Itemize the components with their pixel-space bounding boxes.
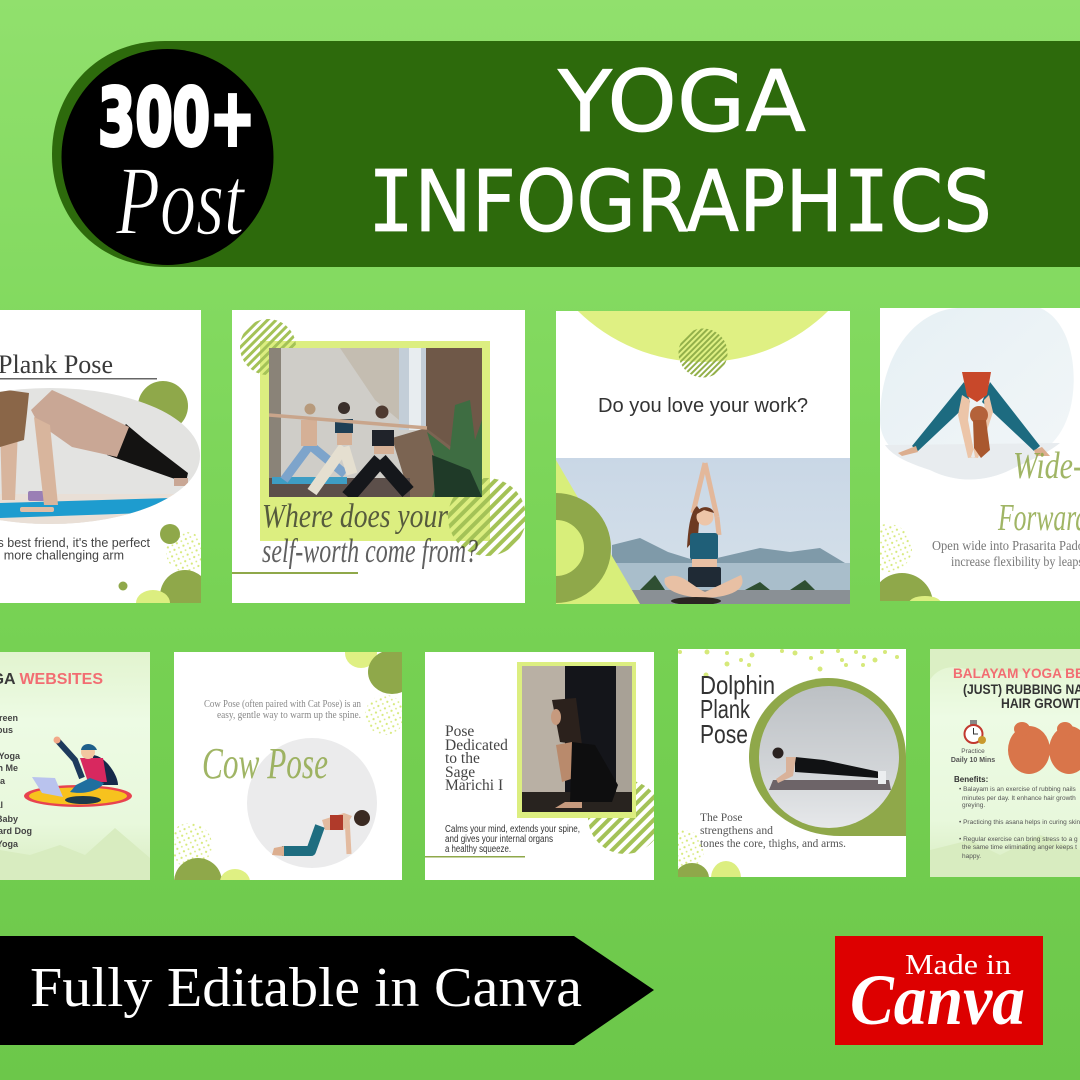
practice label	[951, 748, 995, 764]
panel: cow pose card	[174, 652, 402, 880]
benefits text: • Balayam is an exercise of rubbing nails	[959, 786, 1077, 793]
title: INFOGRAPHICS	[368, 153, 992, 252]
card text	[0, 536, 151, 562]
website list	[0, 713, 32, 849]
script heading: self-worth come from?	[262, 533, 478, 570]
card heading	[953, 665, 1080, 711]
decorative blobs and dots	[118, 524, 201, 603]
badge word: Post	[115, 147, 246, 256]
title: YOGA	[557, 53, 806, 152]
lime frame	[517, 662, 636, 818]
olive ring	[556, 493, 611, 603]
card heading	[445, 723, 508, 794]
olive oval frame	[749, 678, 906, 836]
decorative olive blob	[138, 381, 188, 424]
card text	[700, 812, 846, 850]
lime arc	[578, 311, 828, 362]
script heading: Cow Pose	[202, 739, 328, 788]
banner text: Fully Editable in Canva	[30, 957, 582, 1019]
photo: cow pose	[247, 738, 377, 868]
card text: tones the core, thighs, and arms.	[700, 838, 846, 850]
card text: Calms your mind, extends your spine,	[445, 824, 580, 835]
card heading: Dedicated	[445, 737, 508, 754]
decorative blobs and dots	[880, 524, 940, 601]
panel: self-worth card	[232, 310, 526, 603]
benefits text: • Regular exercise can bring stress to a g	[959, 836, 1078, 843]
photo: woman in plank	[0, 388, 210, 524]
card heading: to the	[445, 750, 480, 767]
card heading: Pose	[700, 719, 748, 749]
card heading	[700, 670, 775, 749]
panel: love your work card	[556, 311, 850, 604]
card text: strengthens and	[700, 825, 773, 837]
card question: Do you love your work?	[598, 395, 808, 417]
card heading: Sage	[445, 764, 475, 781]
banner bar	[52, 41, 1080, 267]
icon: stopwatch	[964, 720, 986, 744]
card text: and gives your internal organs	[445, 834, 553, 845]
card text: s best friend, it's the perfect	[0, 536, 151, 550]
script heading	[262, 498, 478, 570]
benefits text: greying.	[962, 802, 985, 809]
icon: rubbing hands	[1008, 722, 1080, 774]
photo: seated woman arms raised	[556, 458, 850, 605]
badge number: 300+	[98, 72, 255, 164]
decorative blobs bottom	[174, 823, 250, 880]
photo: seated twist	[522, 666, 632, 812]
photo: three women in warrior pose	[269, 348, 482, 497]
benefits text: minutes per day. It enhance hair growth	[962, 795, 1076, 802]
script heading	[998, 452, 1080, 530]
panel: balayam yoga card	[930, 649, 1080, 877]
badge: 300+ Post	[62, 49, 274, 265]
striped circle	[588, 782, 654, 854]
card heading: Marichi I	[445, 777, 503, 794]
card text	[445, 824, 580, 855]
card text: a healthy squeeze.	[445, 844, 511, 855]
lime frame	[260, 341, 490, 541]
decorative dots top	[678, 649, 899, 678]
panel: yoga websites card	[0, 652, 150, 880]
striped circle top	[240, 319, 296, 375]
card heading: Dolphin	[700, 670, 775, 700]
photo: dolphin plank	[759, 686, 899, 828]
badge wordmark: Canva	[850, 960, 1025, 1040]
decorative mountains	[0, 828, 150, 864]
card text: The Pose	[700, 812, 742, 824]
title	[368, 53, 992, 252]
badge caption: Made in	[905, 949, 1012, 981]
benefits text	[954, 775, 1080, 860]
arrow banner: fully editable	[0, 936, 654, 1045]
practice label: Practice	[961, 748, 985, 755]
practice label: Daily 10 Mins	[951, 757, 995, 764]
card text: Cow Pose (often paired with Cat Pose) is an	[204, 699, 362, 710]
lime triangle	[556, 460, 640, 604]
photo: wide-legged forward bend	[880, 308, 1074, 479]
panel: wide-legged forward card	[880, 308, 1080, 601]
panel: dolphin plank card	[664, 649, 906, 895]
card heading: Plank	[700, 694, 751, 724]
card text	[932, 539, 1080, 570]
badge: made in canva	[835, 936, 1043, 1045]
benefits text: the same time eliminating anger keeps t	[962, 844, 1077, 851]
card heading: Plank Pose	[0, 350, 113, 379]
card text: easy, gentle way to warm up the spine.	[217, 710, 361, 721]
panel: plank pose card	[0, 310, 201, 603]
decorative blobs bottom	[664, 830, 741, 895]
card heading: Pose	[445, 723, 474, 740]
illustration: woman with laptop on rug	[24, 736, 132, 807]
card text	[204, 699, 362, 721]
script heading: Where does your	[262, 498, 449, 535]
benefits text: Benefits:	[954, 775, 988, 784]
striped circle	[678, 328, 728, 378]
striped circle bottom	[448, 478, 526, 556]
panel: marichi pose card	[425, 652, 662, 880]
decorative blobs top	[345, 652, 402, 735]
header banner	[52, 41, 1080, 267]
benefits text: happy.	[962, 853, 981, 860]
benefits text: • Practicing this asana helps in curing skin	[959, 819, 1080, 826]
